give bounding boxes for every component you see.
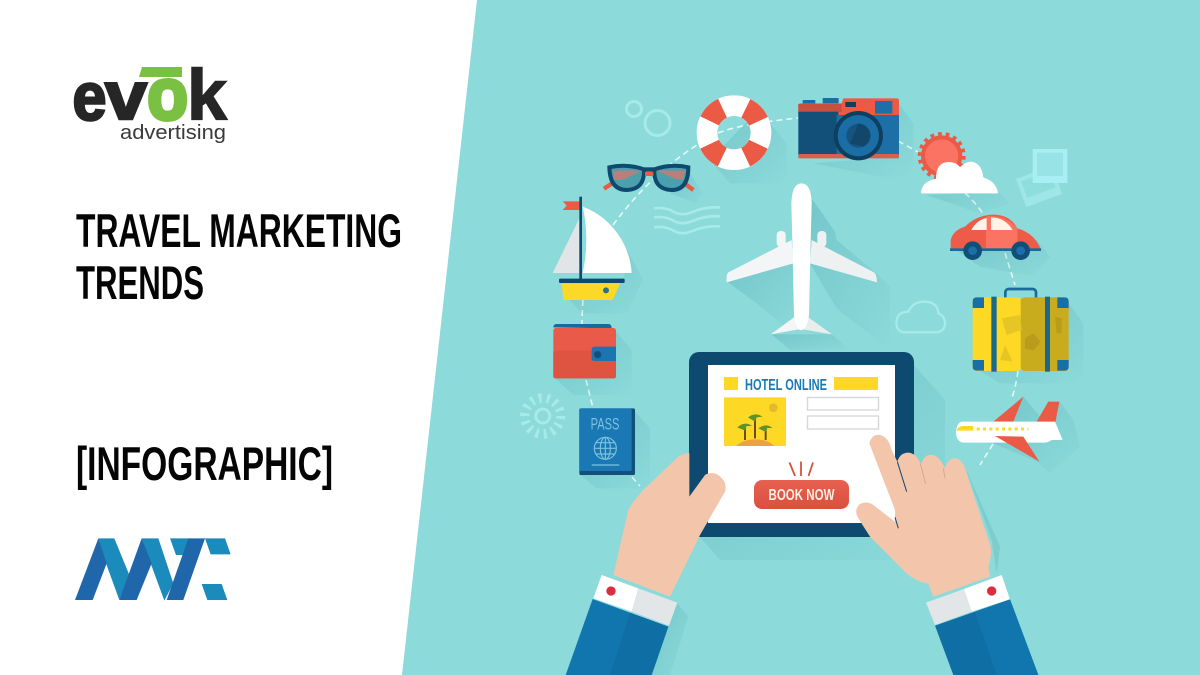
icon: bubbles (626, 102, 670, 136)
icon: sun and cloud (920, 134, 1010, 213)
logo: evok advertising: v (105, 58, 147, 134)
icon: camera (798, 98, 913, 177)
icon: small red plane (956, 397, 1080, 473)
icon: wallet (553, 324, 632, 395)
icon: passport: PASS (591, 414, 619, 433)
logo: evok advertising: k (187, 56, 228, 136)
icon: life ring (707, 106, 787, 183)
panel: teal slanted background (402, 0, 1200, 675)
icon: sailboat (553, 197, 643, 313)
tablet shadow (700, 365, 945, 560)
icon: waves (654, 207, 720, 233)
tablet: hotel booking screen: HOTEL ONLINE (745, 377, 827, 394)
icon: sunglasses (604, 166, 703, 203)
title: Travel Marketing Trends: TRAVEL MARKETING (76, 204, 402, 257)
title: Travel Marketing Trends: TRENDS (76, 256, 204, 309)
logo: MTC mark (75, 538, 231, 601)
logo: evok advertising: advertising (120, 121, 226, 144)
icon: suitcase (973, 289, 1083, 383)
subtitle: infographic tag: [INFOGRAPHIC] (76, 437, 333, 490)
title: Travel Marketing Trends (76, 204, 402, 309)
icon: large white airplane (727, 183, 890, 350)
logo: evok advertising (72, 56, 228, 144)
icon: sun outline (525, 398, 561, 434)
right hand with suit sleeve (856, 435, 1038, 675)
icon: cloud outline (896, 302, 945, 332)
logo: evok advertising: e (72, 59, 106, 135)
logo: evok advertising: o (149, 57, 187, 133)
tablet: hotel booking screen (689, 352, 914, 537)
icon: red car (950, 215, 1050, 277)
icon: passport (579, 408, 650, 488)
icon: photo frames (1016, 149, 1067, 207)
left hand with suit sleeve (566, 453, 726, 675)
tablet: hotel booking screen: BOOK NOW (768, 487, 835, 504)
route: dashed arc connecting icons (582, 118, 1018, 486)
